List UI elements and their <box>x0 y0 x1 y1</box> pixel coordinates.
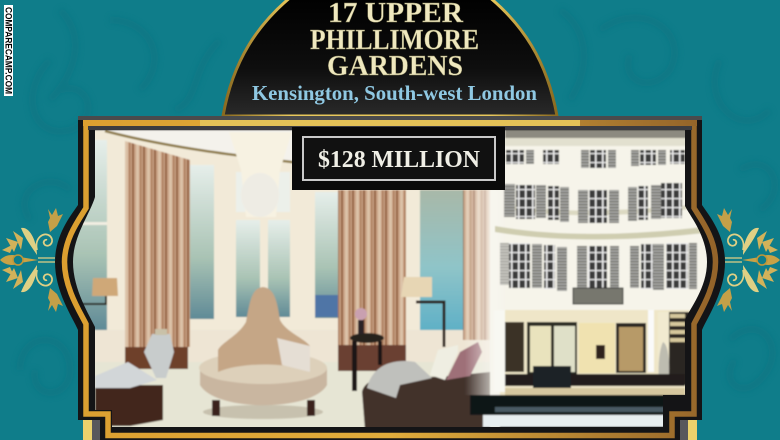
price box <box>292 127 505 190</box>
icon: right gold ornament <box>717 208 780 312</box>
subtitle: location: Kensington, South-west London <box>252 81 537 105</box>
windows <box>70 140 464 330</box>
title: PHILLIMORE <box>310 25 479 56</box>
middle floor windows <box>504 183 682 223</box>
watermark: comparecamp.com: COMPARECAMP.COM <box>2 7 14 94</box>
price text: $128 MILLION <box>318 147 481 173</box>
left armchair <box>95 362 163 426</box>
facade of building <box>465 130 725 427</box>
icon: left gold ornament <box>0 208 63 312</box>
photo: interior and facade <box>60 130 725 432</box>
top floor windows <box>506 150 685 168</box>
title: GARDENS <box>327 51 463 82</box>
ornate picture frame <box>55 117 725 440</box>
title banner: black arch <box>223 0 557 116</box>
ground floor <box>470 310 700 427</box>
curtains <box>125 141 495 371</box>
vase <box>144 329 174 378</box>
right armchair <box>362 342 490 430</box>
tufted round sofa <box>199 287 327 419</box>
room walls and ceiling <box>60 130 500 432</box>
title <box>310 0 479 82</box>
lamps <box>82 277 444 347</box>
side table and flowers <box>350 308 384 391</box>
gold side bars under frame <box>83 418 697 440</box>
chandelier <box>229 132 292 217</box>
gold band under banner <box>78 116 702 130</box>
balcony <box>573 288 623 304</box>
lower floor windows <box>500 243 697 291</box>
